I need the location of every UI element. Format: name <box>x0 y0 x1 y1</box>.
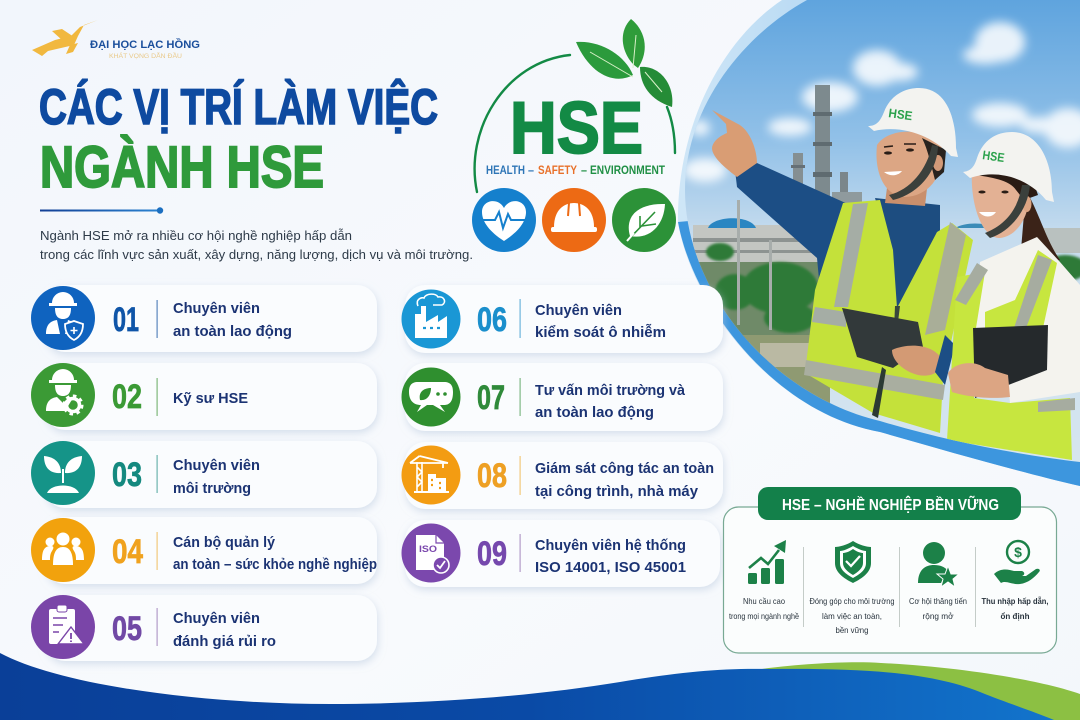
job card 05 <box>31 595 377 661</box>
job card 06: 06 <box>477 301 507 339</box>
HSE logo <box>472 19 676 252</box>
caption: contribution: bền vững <box>836 625 869 635</box>
tagline: ENVIRONMENT <box>590 163 666 177</box>
icon: risk assessment <box>31 595 95 659</box>
job card 04 <box>31 517 377 584</box>
icon: golden plane <box>32 20 98 56</box>
job card 04: an toàn – sức khỏe nghề nghiệp <box>173 556 377 573</box>
vest <box>947 272 1072 460</box>
arm and shirt <box>736 163 846 278</box>
head <box>876 132 943 197</box>
head <box>972 174 1027 238</box>
caption: contribution: làm việc an toàn, <box>822 611 882 621</box>
job card 08: 08 <box>477 457 507 495</box>
title <box>39 79 438 200</box>
intro text: trong các lĩnh vực sản xuất, xây dựng, năng lượng, dịch vụ và môi trường. <box>40 247 473 262</box>
woman: HSE <box>982 148 1005 165</box>
logo leaves <box>576 19 672 107</box>
panel header <box>758 487 1021 520</box>
neck <box>885 188 927 206</box>
logo arc <box>475 55 675 192</box>
intro text <box>40 228 473 262</box>
job card 07: an toàn lao động <box>535 404 654 421</box>
icon: polluting factory <box>402 290 460 348</box>
photo: two HSE engineers at an industrial site <box>680 0 1080 470</box>
job card 09 <box>402 520 720 587</box>
tagline <box>486 163 666 177</box>
job card 02 <box>31 363 377 430</box>
icon: hand with coin: $ <box>1014 544 1022 560</box>
icon: HSE engineer <box>31 363 95 427</box>
helmet <box>963 132 1054 202</box>
icon: person with star <box>918 542 959 587</box>
panel header: HSE – NGHỀ NGHIỆP BỀN VỮNG <box>782 494 999 514</box>
university logo: ĐẠI HỌC LẠC HỒNG <box>90 38 200 51</box>
bottom waves <box>0 653 1080 720</box>
panel: sustainable career <box>724 487 1056 653</box>
job card 02: 02 <box>112 378 142 416</box>
job card 05: Chuyên viên <box>173 610 260 627</box>
icon: seedling <box>31 441 95 505</box>
icon: growth chart <box>748 540 786 584</box>
man: HSE <box>888 106 913 123</box>
pointing hand <box>712 110 757 177</box>
tagline: – <box>528 163 534 177</box>
tagline: HEALTH <box>486 163 525 177</box>
icon: hand with coin <box>994 541 1040 584</box>
job card 04: 04 <box>112 533 143 571</box>
job card 02: Kỹ sư HSE <box>173 390 248 407</box>
job card 08: tại công trình, nhà máy <box>535 483 699 500</box>
job card 09: ISO 14001, ISO 45001 <box>535 559 686 576</box>
trees and ground <box>680 200 1080 405</box>
job card 06 <box>402 285 723 353</box>
tagline: – <box>581 163 587 177</box>
job card 01: an toàn lao động <box>173 323 292 340</box>
job card 05: đánh giá rủi ro <box>173 633 276 650</box>
job card 04: Cán bộ quản lý <box>173 534 276 551</box>
caption: income: Thu nhập hấp dẫn, <box>982 596 1048 606</box>
caption: income: ổn định <box>1000 611 1030 621</box>
title: NGÀNH HSE <box>40 135 324 200</box>
caption: demand <box>729 596 799 621</box>
job card 06: Chuyên viên <box>535 302 622 319</box>
vest <box>805 200 973 433</box>
man <box>712 88 973 433</box>
caption: demand: trong mọi ngành nghề <box>729 611 799 621</box>
helmet <box>868 88 958 157</box>
icon: shield check <box>835 541 871 583</box>
hair <box>1022 198 1060 260</box>
job card 01: Chuyên viên <box>173 300 260 317</box>
icon: team <box>31 518 95 582</box>
icon: consulting speech bubble <box>402 368 460 426</box>
icon: environment leaf <box>612 188 676 252</box>
title: CÁC VỊ TRÍ LÀM VIỆC <box>39 79 438 135</box>
university logo: KHÁT VỌNG DẪN ĐẦU <box>109 53 182 60</box>
icon: construction crane <box>402 446 460 504</box>
woman <box>947 132 1080 460</box>
caption: promotion: rộng mở <box>922 611 954 621</box>
intro text: Ngành HSE mở ra nhiều cơ hội nghề nghiệp hấp dẫn <box>40 228 352 243</box>
clipboard <box>973 325 1048 398</box>
icon: safety officer <box>31 286 95 350</box>
job card 01: 01 <box>113 301 139 339</box>
icon: ISO document <box>402 524 460 582</box>
job card 03: 03 <box>112 456 142 494</box>
job card 05: 05 <box>112 610 142 648</box>
clouds <box>683 22 1080 182</box>
caption: contribution: Đóng góp cho môi trường <box>810 596 895 606</box>
icon: health <box>472 188 536 252</box>
job card 07: Tư vấn môi trường và <box>535 382 686 399</box>
tablet <box>842 308 923 368</box>
job card 09: Chuyên viên hệ thống <box>535 537 686 554</box>
university logo <box>32 20 200 60</box>
icon: safety helmet <box>542 188 606 252</box>
caption: promotion: Cơ hội thăng tiến <box>909 596 967 606</box>
HSE logo: HSE <box>510 88 643 169</box>
photo frame: curved blue band <box>678 0 1080 486</box>
job card 08: Giám sát công tác an toàn <box>535 460 714 477</box>
job card 03: Chuyên viên <box>173 457 260 474</box>
icon: ISO document: ISO <box>419 544 437 554</box>
chimneys and plant <box>693 85 1080 263</box>
caption: demand: Nhu cầu cao <box>743 596 785 606</box>
caption: income <box>982 596 1048 621</box>
tagline: SAFETY <box>538 163 577 177</box>
job card 06: kiểm soát ô nhiễm <box>535 324 666 341</box>
job card 03 <box>31 441 377 508</box>
job card 08 <box>402 442 723 509</box>
caption: contribution <box>810 596 895 635</box>
job card 09: 09 <box>477 535 507 573</box>
caption: promotion <box>909 596 967 621</box>
job card 03: môi trường <box>173 480 251 497</box>
shirt <box>975 237 1080 403</box>
job card 07: 07 <box>477 379 505 417</box>
job card 07 <box>402 363 723 431</box>
job card 01 <box>31 285 377 352</box>
title divider <box>40 207 163 214</box>
